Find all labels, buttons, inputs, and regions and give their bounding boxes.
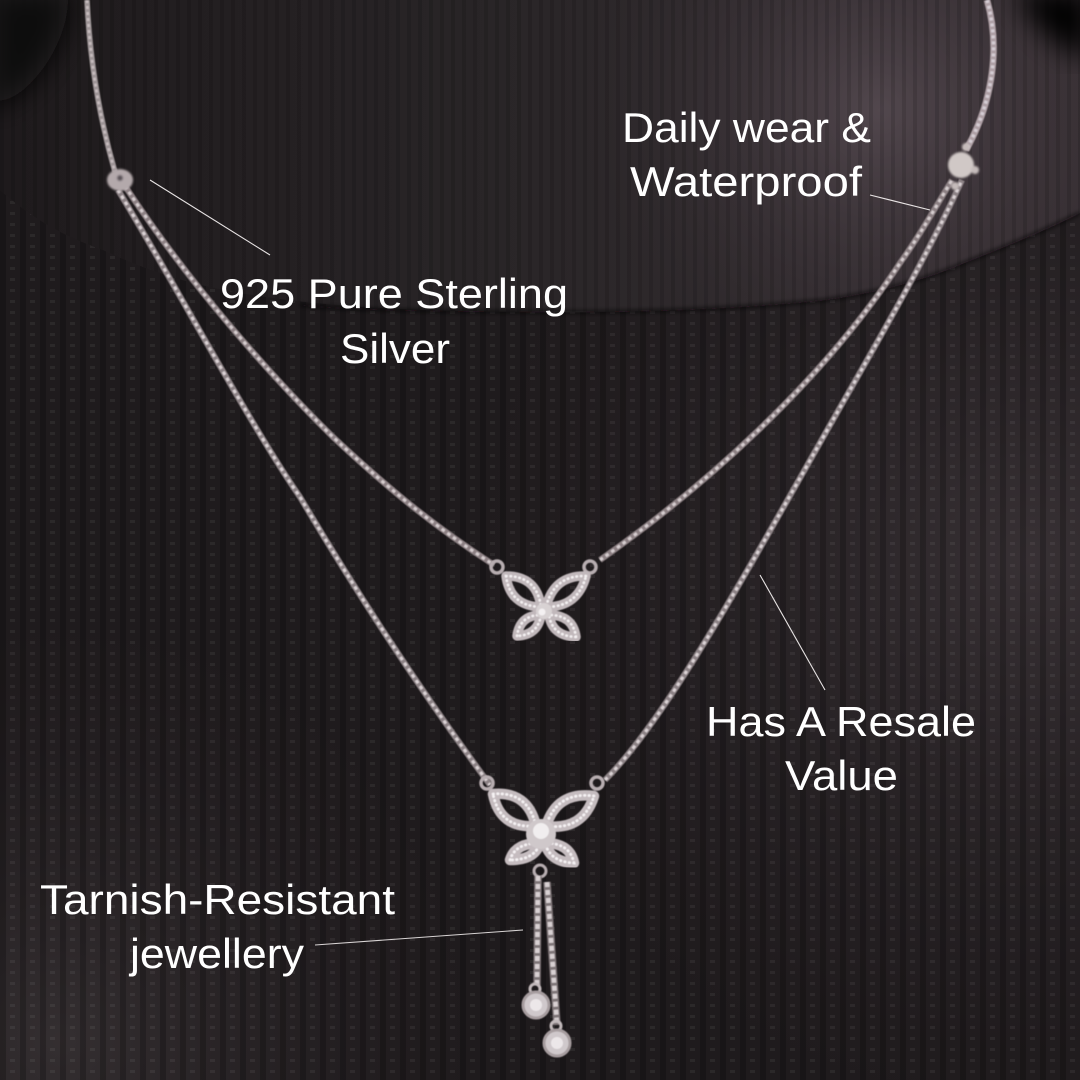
drop: left bbox=[523, 984, 549, 1018]
label: sterling silver: 925 Pure Sterling bbox=[220, 270, 568, 317]
leader line: resale bbox=[760, 575, 825, 690]
leader line: tarnish bbox=[315, 930, 523, 945]
icon: right clasp bbox=[948, 143, 979, 190]
label: sterling silver: Silver bbox=[340, 325, 450, 372]
lower butterfly pendant bbox=[481, 777, 603, 863]
callout: Daily wear & Waterproof bbox=[622, 104, 930, 210]
tassel chains and drops bbox=[523, 865, 570, 1056]
necklace: chains bbox=[87, 0, 994, 785]
chain: right top segment bbox=[966, 0, 994, 150]
chain: short strand bbox=[125, 180, 952, 565]
leader line: waterproof bbox=[870, 195, 930, 210]
leader line: sterling silver bbox=[150, 180, 270, 255]
chain: left top segment bbox=[87, 0, 115, 172]
callout: 925 Pure Sterling Silver bbox=[150, 180, 580, 372]
upper butterfly pendant bbox=[491, 561, 596, 637]
chain: long strand bbox=[118, 180, 962, 785]
label: resale: Value bbox=[785, 752, 898, 799]
label: waterproof: Daily wear & bbox=[622, 104, 871, 151]
drop: right bbox=[544, 1021, 570, 1056]
label: tarnish: Tarnish-Resistant bbox=[40, 876, 395, 923]
label: resale: Has A Resale bbox=[706, 698, 976, 745]
label: waterproof: Waterproof bbox=[630, 158, 862, 205]
icon: left clasp bbox=[107, 169, 133, 191]
label: tarnish: jewellery bbox=[128, 930, 304, 977]
callout: Has A Resale Value bbox=[706, 575, 988, 799]
callout: Tarnish-Resistant jewellery bbox=[40, 876, 523, 977]
